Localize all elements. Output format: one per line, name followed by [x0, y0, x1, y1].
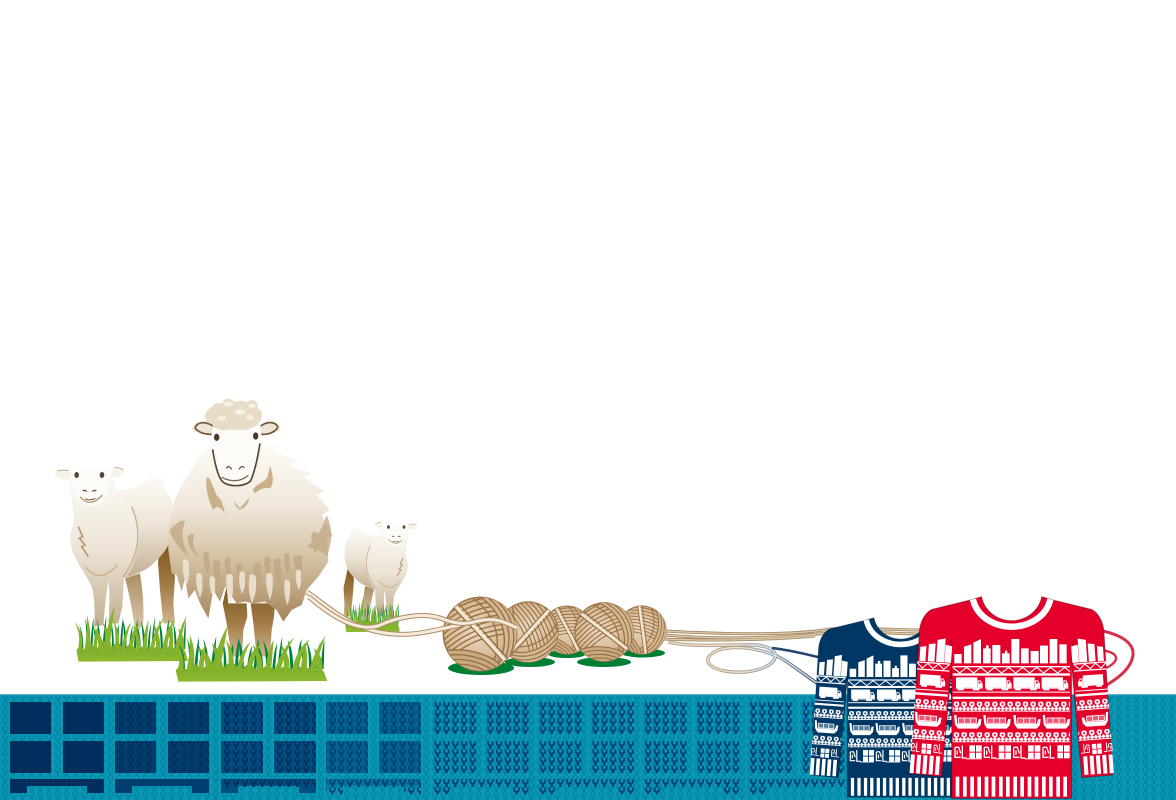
red yarn loop behind red sweater: [1098, 630, 1133, 686]
yarn strands from balls to sweaters: [664, 628, 925, 684]
yarn strands from big sheep to balls: [307, 592, 517, 634]
wool top: [205, 399, 262, 432]
big sheep in the middle: [168, 399, 333, 657]
knitted pallet pattern fading from solid to stitches: [10, 702, 845, 794]
knitted teal band: [0, 694, 1176, 800]
red knitted sweater: [910, 597, 1114, 798]
ears: [192, 421, 281, 435]
small lamb on the right: [344, 522, 418, 624]
blue knitted sweater: [810, 618, 992, 797]
neck tufts: [206, 466, 273, 513]
fleece shading tufts: [169, 515, 331, 588]
green ball shadows: [448, 648, 665, 675]
face: [212, 430, 261, 486]
grass under big sheep: [173, 626, 327, 682]
yarn balls: [429, 580, 680, 685]
left sheep: [54, 467, 175, 637]
fleece body: [168, 442, 333, 622]
grass under small lamb: [344, 595, 400, 632]
grass under left sheep: [75, 606, 188, 662]
legs: [223, 587, 275, 657]
